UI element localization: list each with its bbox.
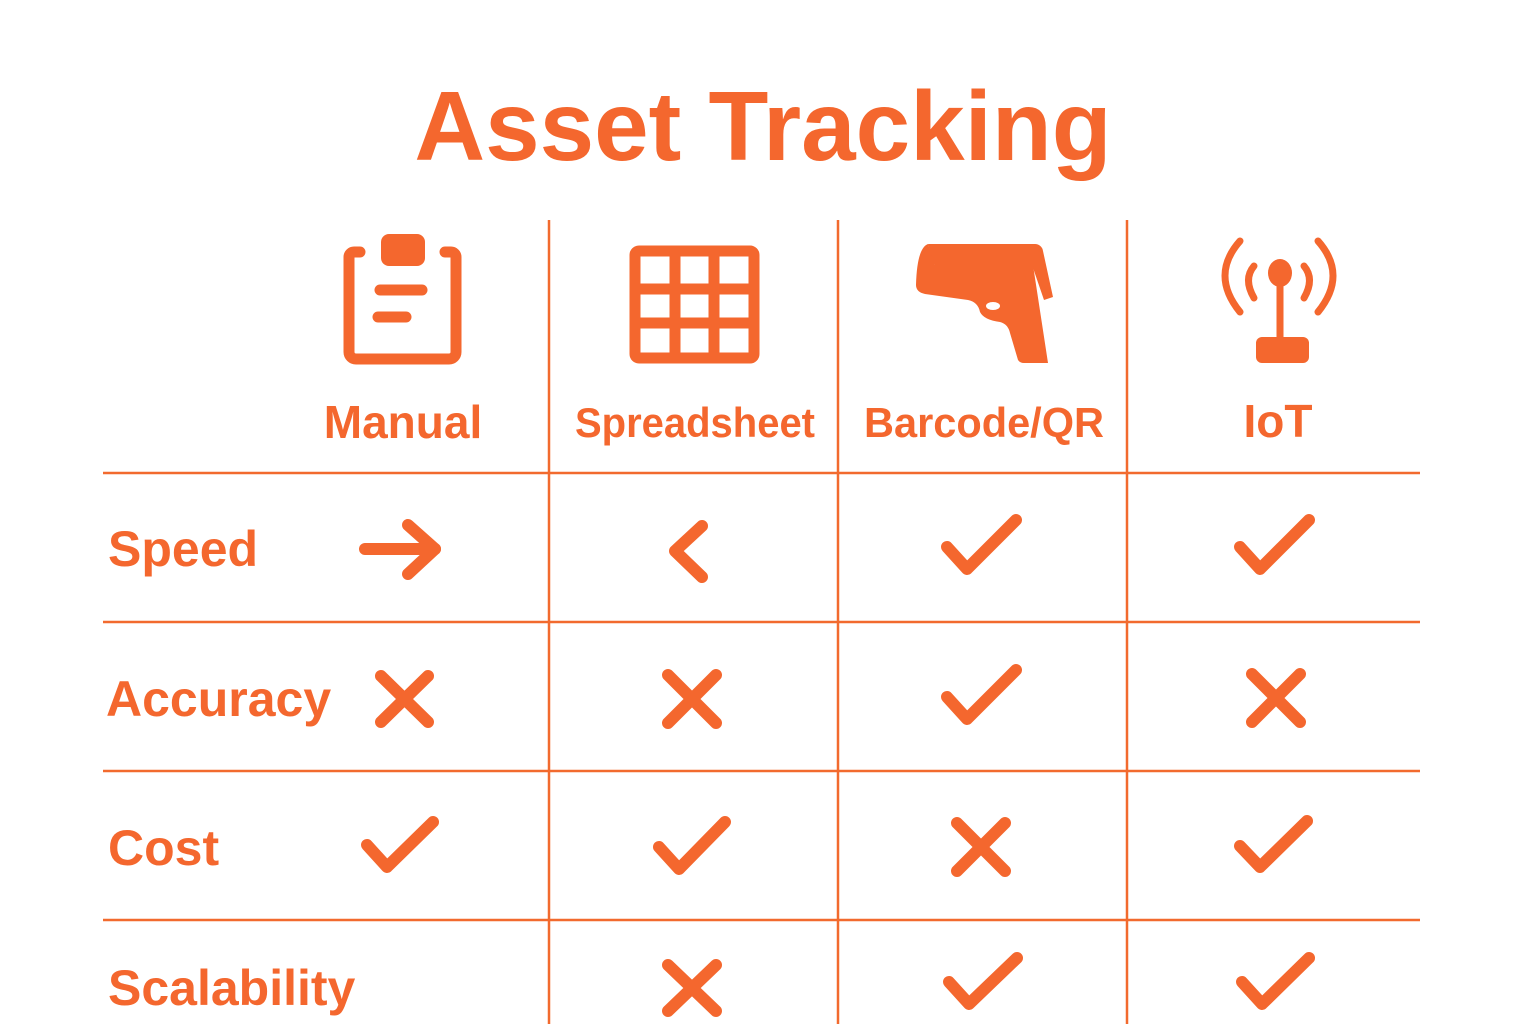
cross [957, 823, 1005, 871]
check [947, 520, 1016, 569]
row labels: Cost [108, 820, 219, 876]
column headers [324, 395, 1312, 448]
icon: IoT antenna [1225, 241, 1333, 363]
icon: clipboard [349, 234, 456, 359]
check [367, 822, 433, 867]
check [1242, 958, 1309, 1004]
table grid [103, 220, 1420, 1024]
cross [381, 676, 428, 722]
title: Asset Tracking [414, 71, 1112, 181]
column headers: Manual [324, 396, 482, 448]
column headers: Spreadsheet [575, 399, 815, 446]
check [1240, 520, 1309, 569]
row labels: Speed [108, 521, 258, 577]
check [947, 670, 1016, 719]
cross [668, 675, 716, 723]
icon: spreadsheet [635, 251, 754, 358]
column headers: Barcode/QR [864, 399, 1104, 446]
icon: barcode scanner [916, 244, 1053, 363]
marks [365, 520, 1309, 1011]
row labels: Scalability [108, 960, 356, 1016]
row labels: Accuracy [106, 671, 331, 727]
chevron left (Spreadsheet speed) [675, 526, 702, 577]
check [949, 958, 1017, 1004]
row labels [106, 521, 356, 1016]
cross [668, 965, 716, 1011]
cross [1252, 674, 1300, 722]
arrow right (Manual speed) [365, 525, 435, 574]
check [659, 822, 725, 869]
check [1240, 821, 1307, 867]
column headers: IoT [1244, 395, 1312, 447]
